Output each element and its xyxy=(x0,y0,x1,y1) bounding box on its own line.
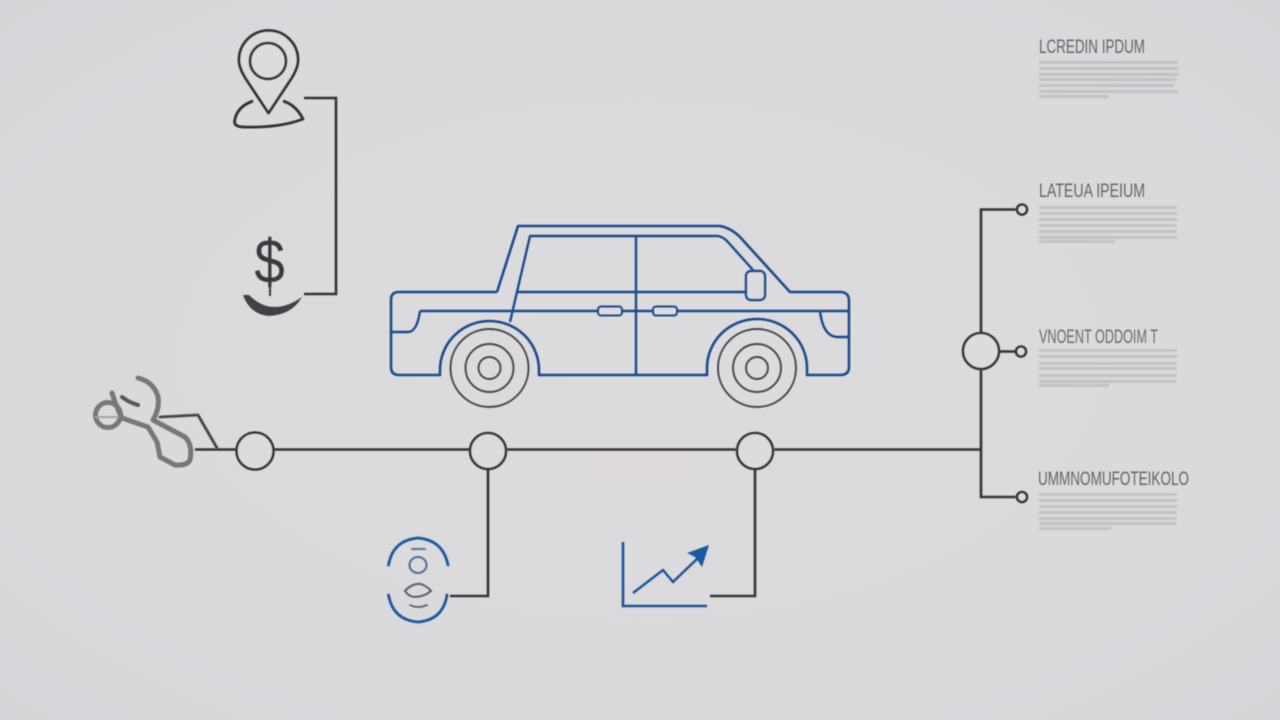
label block 1 xyxy=(1039,37,1178,98)
paragraph lines 4 xyxy=(1039,493,1177,530)
icon: growth chart xyxy=(623,542,709,606)
paragraph lines 1 xyxy=(1039,61,1178,98)
label block 4 xyxy=(1038,469,1189,530)
icon: wrench xyxy=(96,378,217,465)
paragraph lines 3 xyxy=(1039,349,1177,387)
heading 2: LATEUA IPEIUM xyxy=(1039,181,1145,202)
car windows and door lines xyxy=(391,236,849,375)
timeline node circles xyxy=(236,204,1027,502)
icon: location pin xyxy=(234,31,303,127)
car side mirror xyxy=(746,271,765,300)
icon: car xyxy=(391,226,849,407)
car door handles xyxy=(598,306,622,316)
label block 2 xyxy=(1039,181,1177,243)
timeline and connector lines xyxy=(195,98,1016,596)
label block 3 xyxy=(1039,327,1177,387)
icon: dollar with smile xyxy=(243,228,302,316)
icon: dollar with smile: $ xyxy=(254,228,285,297)
icon: coin xyxy=(388,538,448,622)
rear wheel xyxy=(450,329,528,407)
car body outline xyxy=(391,226,849,375)
heading 4: UMMNOMUFOTEIKOLO xyxy=(1038,469,1189,490)
heading 3: VNOENT ODDOIM T xyxy=(1039,327,1158,348)
heading 1: LCREDIN IPDUM xyxy=(1039,37,1145,58)
front wheel xyxy=(718,329,796,407)
paragraph lines 2 xyxy=(1039,206,1177,243)
